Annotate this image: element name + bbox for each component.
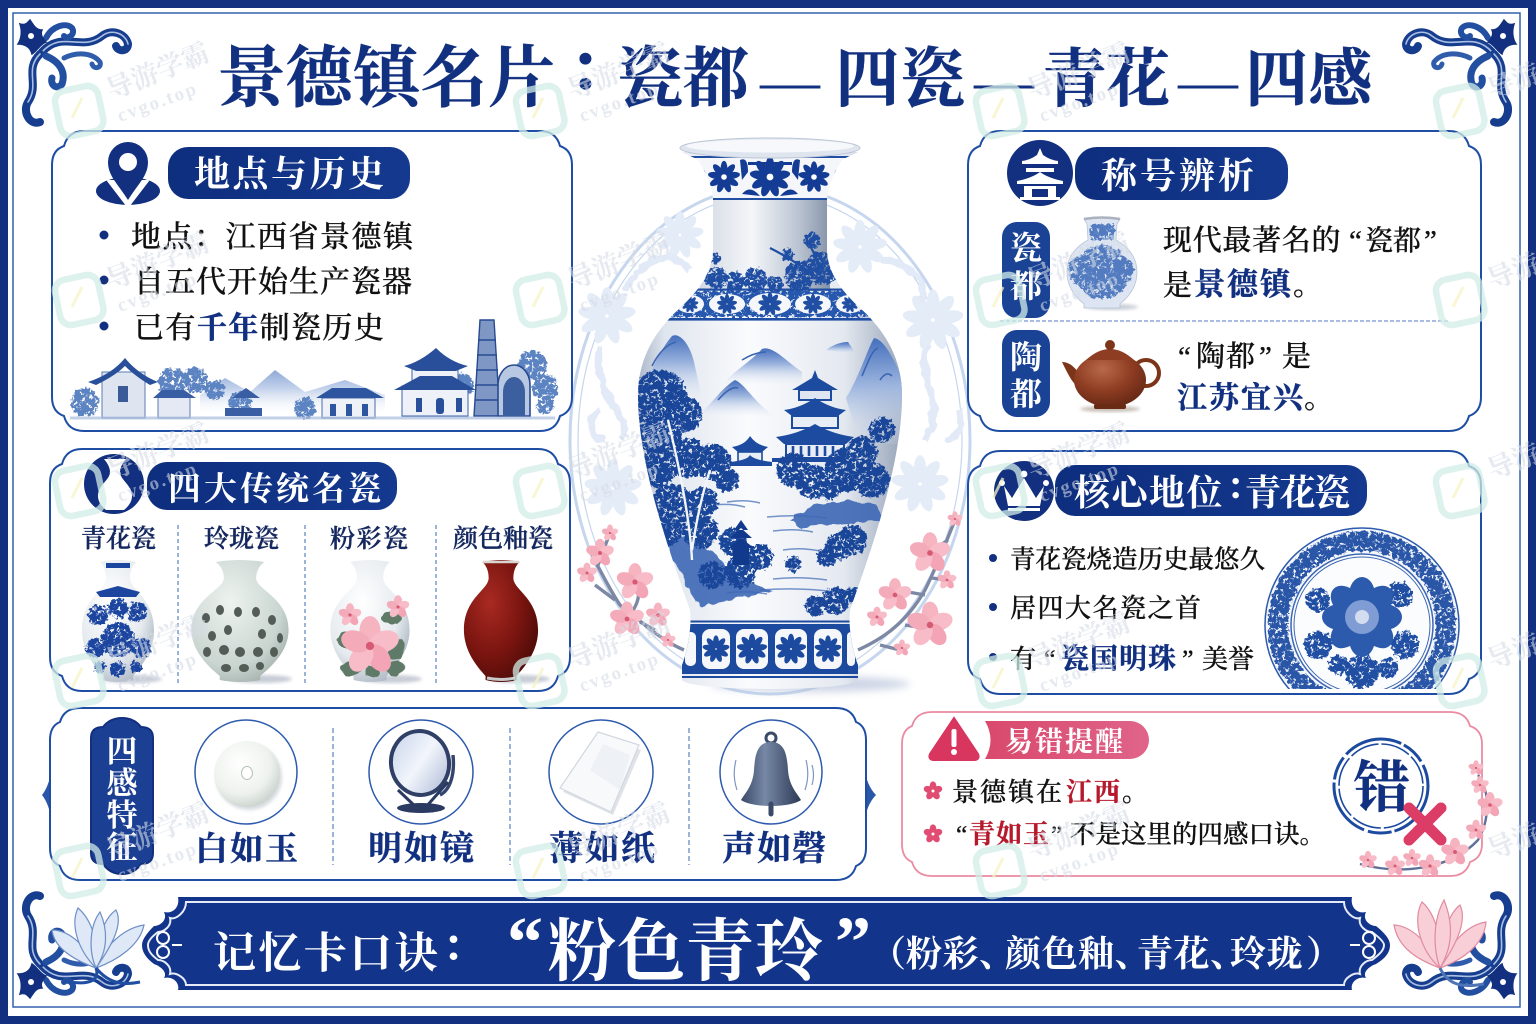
- mnemonic text: 记忆卡口诀: [213, 930, 440, 978]
- title: 四感: [1245, 44, 1375, 115]
- lotus left: [52, 908, 144, 984]
- heading: title distinction: [1075, 147, 1288, 200]
- divider: [1000, 320, 1450, 322]
- trait: bright as mirror: [368, 720, 476, 868]
- item: blue and white porcelain: [81, 525, 162, 683]
- trait: white as jade: 白如玉: [195, 831, 300, 868]
- vase rim: [680, 138, 860, 158]
- long hall: [322, 398, 375, 418]
- watermark: 导游学霸: [563, 797, 674, 866]
- watermark: cvgo.top: [115, 268, 201, 317]
- seal: wrong stamp: 错: [1354, 758, 1410, 820]
- list: location facts: 地点：江西省景德镇: [131, 221, 416, 254]
- heading: four famous porcelains: [147, 462, 397, 510]
- text: Jingdezhen is the porcelain capital: 。: [1293, 270, 1322, 302]
- icon: crown: [994, 461, 1054, 521]
- watermark: 导游学霸: [563, 417, 674, 486]
- text: Jingdezhen is the porcelain capital: 瓷都: [1365, 225, 1421, 257]
- mistake list: [923, 778, 1325, 849]
- list: core status: [989, 545, 1265, 675]
- text: Jingdezhen is the porcelain capital: [1163, 224, 1437, 302]
- heading: location and history: 地点与历史: [194, 154, 387, 194]
- corner ornament: bottom left: [18, 895, 128, 998]
- panel: title distinction: [968, 131, 1481, 431]
- mnemonic text: ”: [835, 902, 871, 982]
- vase main pagoda: [730, 370, 854, 466]
- vase tree trunks: [668, 420, 710, 560]
- vase distant mountains: [640, 335, 904, 444]
- text: Yixing is the pottery capital: ”: [1259, 341, 1272, 373]
- image: purple clay teapot: [1062, 340, 1159, 412]
- vase shadow: [710, 676, 910, 692]
- item: linglong porcelain: 玲珑瓷: [204, 525, 279, 553]
- corner ornament: top right: [1406, 20, 1516, 123]
- watermark: cvgo.top: [1037, 458, 1123, 507]
- plaque: four traits: 征: [106, 830, 138, 865]
- mnemonic text: ：: [442, 924, 485, 971]
- badge: porcelain capital: [1002, 222, 1050, 318]
- list: location facts: 自五代开始生产瓷器: [134, 266, 413, 299]
- corner ornament: bottom right: [1406, 895, 1516, 998]
- item: linglong porcelain: [191, 525, 292, 683]
- badge: pottery capital: 都: [1010, 376, 1042, 412]
- text: Yixing is the pottery capital: 陶都: [1196, 340, 1256, 373]
- watermark: cvgo.top: [115, 458, 201, 507]
- title: ：: [568, 34, 633, 106]
- vase water lines: [715, 501, 835, 594]
- vase trees: [633, 370, 895, 616]
- blossom branch: [1358, 760, 1504, 878]
- watermark: cvgo.top: [115, 838, 201, 887]
- vase base band: [680, 620, 860, 678]
- watermark: 导游学霸: [1023, 227, 1134, 296]
- heading: common mistakes: 易错提醒: [1005, 725, 1125, 758]
- watermark: 导游学霸: [563, 607, 674, 676]
- list: core status: 青花瓷烧造历史最悠久: [1010, 545, 1265, 574]
- icon: map pin: [96, 142, 160, 206]
- brick chimney: [474, 320, 500, 416]
- seal: wrong stamp: [1334, 739, 1441, 840]
- panel: common mistakes: [902, 712, 1504, 878]
- mistake list: “: [956, 820, 967, 849]
- list: core status: 居四大名瓷之首: [1010, 594, 1203, 623]
- mnemonic text: （: [870, 934, 906, 974]
- watermark: 导游学霸: [563, 37, 674, 106]
- watermark: 导游学霸: [102, 607, 213, 676]
- watermark: cvgo.top: [115, 78, 201, 127]
- icon: warning triangle: [929, 718, 979, 760]
- mnemonic text: ）: [1306, 934, 1342, 974]
- item: colour glaze porcelain: 颜色釉瓷: [453, 525, 553, 553]
- mistake list: 江西: [1066, 778, 1122, 807]
- plaque: four traits: 特: [106, 798, 138, 833]
- list: core status: “: [1044, 645, 1056, 674]
- trait: thin as paper: [549, 720, 657, 868]
- item: famille rose porcelain: [330, 525, 422, 683]
- heading: common mistakes: [985, 721, 1149, 759]
- watermark: 导游学霸: [1023, 37, 1134, 106]
- side ornaments: [42, 765, 876, 825]
- vase mountain ridges: [652, 342, 892, 400]
- icon: vase: [84, 454, 144, 514]
- heading: four famous porcelains: 四大传统名瓷: [168, 471, 384, 508]
- watermark: cvgo.top: [1037, 78, 1123, 127]
- title: 青花: [1043, 44, 1170, 115]
- trait: white as jade: [195, 720, 300, 868]
- title: 瓷都: [617, 43, 749, 116]
- list: core status: ”: [1182, 645, 1194, 674]
- blossom branch left: [576, 525, 684, 650]
- main tower: [402, 386, 468, 416]
- image: small blue vase: [1067, 218, 1138, 310]
- panel: four sensory traits: [42, 708, 876, 880]
- image: blue and white plate: [1264, 527, 1460, 689]
- main blue-and-white vase: [633, 138, 910, 692]
- mnemonic text: 粉色青玲: [548, 914, 824, 990]
- item: famille rose porcelain: 粉彩瓷: [330, 525, 410, 553]
- mnemonic text: 玲珑: [1230, 934, 1303, 974]
- watermark: cvgo.top: [115, 648, 201, 697]
- mistake list: 。: [1122, 778, 1150, 807]
- kiln arch: [498, 365, 530, 416]
- badge: porcelain capital: 瓷: [1010, 230, 1042, 266]
- banner: memory mnemonic: [142, 897, 1390, 990]
- list: core status: 美誉: [1202, 645, 1254, 674]
- watermark: cvgo.top: [577, 648, 663, 697]
- temple small: [225, 388, 262, 416]
- item: colour glaze porcelain: [453, 525, 553, 683]
- watermark: cvgo.top: [1037, 648, 1123, 697]
- vase shoulder band: [667, 288, 873, 321]
- watermark: 导游学霸: [102, 417, 213, 486]
- watermark: 导游学霸: [563, 227, 674, 296]
- heading: core status: 核心地位: [1074, 473, 1224, 513]
- list: location facts: [100, 221, 416, 345]
- icon: temple: [1007, 140, 1073, 206]
- watermark: cvgo.top: [1037, 838, 1123, 887]
- text: Jingdezhen is the porcelain capital: 景德镇: [1194, 267, 1295, 302]
- text: Yixing is the pottery capital: [1177, 340, 1334, 415]
- text: Yixing is the pottery capital: “: [1178, 341, 1191, 373]
- title: —: [1177, 48, 1239, 114]
- text: Jingdezhen is the porcelain capital: 现代最著名的: [1163, 224, 1341, 257]
- watermark: cvgo.top: [577, 268, 663, 317]
- title: —: [759, 48, 821, 114]
- vase rocks: [668, 501, 885, 606]
- watermark: 导游学霸: [102, 227, 213, 296]
- trait: sounds like a chime: 声如磬: [722, 830, 827, 868]
- blossom branch right: [858, 511, 963, 657]
- badge: pottery capital: 陶: [1010, 339, 1042, 375]
- trait: bright as mirror: 明如镜: [368, 830, 476, 868]
- panel: four famous porcelains: [50, 449, 570, 691]
- plaque: four traits: 感: [106, 766, 140, 801]
- vase small pagoda: [728, 520, 754, 565]
- illustration: Jingdezhen townscape: [70, 320, 558, 419]
- trait: sounds like a chime: [720, 720, 827, 868]
- vase collar band: [690, 156, 850, 200]
- mistake list: ”: [1051, 820, 1062, 849]
- heading: core status: [1055, 465, 1367, 516]
- lotus right: [1394, 900, 1486, 986]
- watermark: 导游学霸: [1023, 797, 1134, 866]
- heading: core status: ：: [1226, 467, 1262, 507]
- heading: location and history: [168, 147, 410, 199]
- vase upper foliage: [705, 232, 839, 292]
- list: location facts: 已有千年制瓷历史: [134, 312, 385, 345]
- central medallion background: [570, 186, 970, 694]
- text: Yixing is the pottery capital: 江苏宜兴: [1177, 382, 1305, 415]
- vase body: [638, 152, 902, 689]
- list: core status: 瓷国明珠: [1061, 643, 1177, 675]
- text: Yixing is the pottery capital: 是: [1282, 340, 1311, 373]
- title: —: [973, 48, 1035, 114]
- vase neck shading: [700, 199, 830, 291]
- heading: title distinction: 称号辨析: [1101, 156, 1257, 196]
- mistake list: 不是这里的四感口诀。: [1070, 820, 1325, 849]
- plaque: four traits: 四: [106, 734, 138, 769]
- trait: thin as paper: 薄如纸: [549, 830, 657, 868]
- badge: porcelain capital: 都: [1010, 268, 1042, 304]
- item: blue and white porcelain: 青花瓷: [81, 525, 156, 553]
- watermark: cvgo.top: [1037, 268, 1123, 317]
- mnemonic text: 粉彩、: [906, 934, 1016, 974]
- text: Jingdezhen is the porcelain capital: ”: [1424, 225, 1437, 257]
- text: Jingdezhen is the porcelain capital: “: [1349, 225, 1362, 257]
- heading: core status: 青花瓷: [1245, 473, 1350, 513]
- dividers: [178, 525, 436, 685]
- mnemonic text: 颜色釉、: [1005, 934, 1151, 974]
- mistake list: 景德镇在: [952, 778, 1064, 807]
- dividers: [333, 728, 689, 865]
- corner ornament: top left: [18, 20, 128, 123]
- mnemonic text: 青花、: [1137, 934, 1247, 974]
- watermark: cvgo.top: [577, 458, 663, 507]
- watermark: 导游学霸: [102, 797, 213, 866]
- house left: [102, 372, 145, 418]
- text: Yixing is the pottery capital: 。: [1304, 382, 1334, 415]
- watermark: cvgo.top: [577, 838, 663, 887]
- watermark: 导游学霸: [102, 37, 213, 106]
- plaque: four traits: [91, 718, 153, 874]
- mnemonic text: “: [507, 902, 543, 982]
- panel: core status: [968, 451, 1481, 722]
- panel: location and history: [52, 131, 572, 431]
- list: core status: 有: [1010, 645, 1036, 674]
- text: Jingdezhen is the porcelain capital: 是: [1163, 269, 1192, 302]
- title: 四瓷: [835, 44, 965, 116]
- title: 景德镇名片: [218, 42, 556, 116]
- mistake list: 青如玉: [969, 819, 1050, 849]
- watermark: 导游学霸: [1023, 417, 1134, 486]
- watermark: 导游学霸: [1023, 607, 1134, 676]
- watermark: cvgo.top: [577, 78, 663, 127]
- badge: pottery capital: [1002, 330, 1050, 417]
